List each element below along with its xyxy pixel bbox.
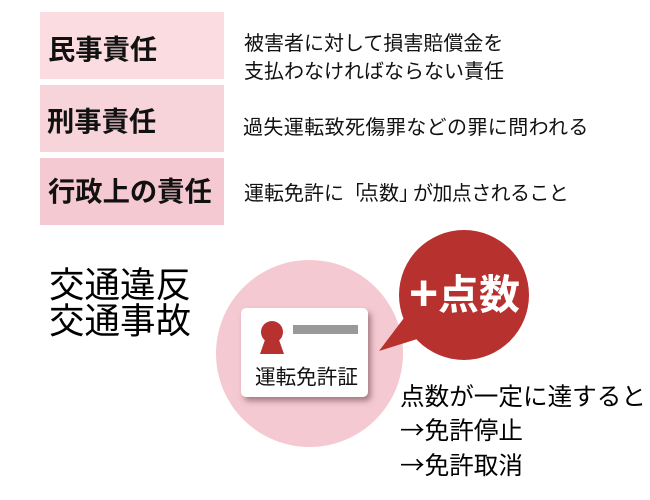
text: license label: 運転免許証 <box>255 366 358 389</box>
heading: administrative liability: 行政上の責任 <box>48 176 212 207</box>
text: civil liability description: 支払わなければならない責任 <box>244 61 504 83</box>
panel: administrative liability label <box>40 158 224 225</box>
text: consequences of points: 点数が一定に達すると <box>400 384 646 411</box>
text: administrative liability description: 運転免許に「点数」が加点されること <box>244 183 568 205</box>
text: traffic violation and accident: 交通事故 <box>49 301 191 341</box>
text: consequences of points: →免許取消 <box>400 446 523 482</box>
text: consequences of points: →免許停止 <box>400 411 523 447</box>
heading: civil liability: 民事責任 <box>48 34 157 65</box>
bar: grey name placeholder <box>293 325 358 334</box>
text: traffic violation and accident <box>49 265 191 341</box>
circle: pink background <box>216 260 403 447</box>
icon: person <box>260 321 284 354</box>
panel: criminal liability label <box>40 85 224 152</box>
text: traffic violation and accident: 交通違反 <box>49 265 191 305</box>
text: consequences of points <box>400 384 646 482</box>
text: criminal liability description: 過失運転致死傷罪などの罪に問われる <box>243 117 589 139</box>
card: driver's license <box>241 308 368 397</box>
heading: criminal liability: 刑事責任 <box>47 106 156 137</box>
text: plus points: 点数 <box>438 272 520 318</box>
text: plus points: + <box>409 265 438 321</box>
text: plus points <box>409 265 520 321</box>
text: civil liability description <box>244 33 504 83</box>
speech bubble: red <box>379 230 529 360</box>
panel: civil liability label <box>40 12 224 79</box>
text: civil liability description: 被害者に対して損害賠償金を <box>244 33 503 55</box>
